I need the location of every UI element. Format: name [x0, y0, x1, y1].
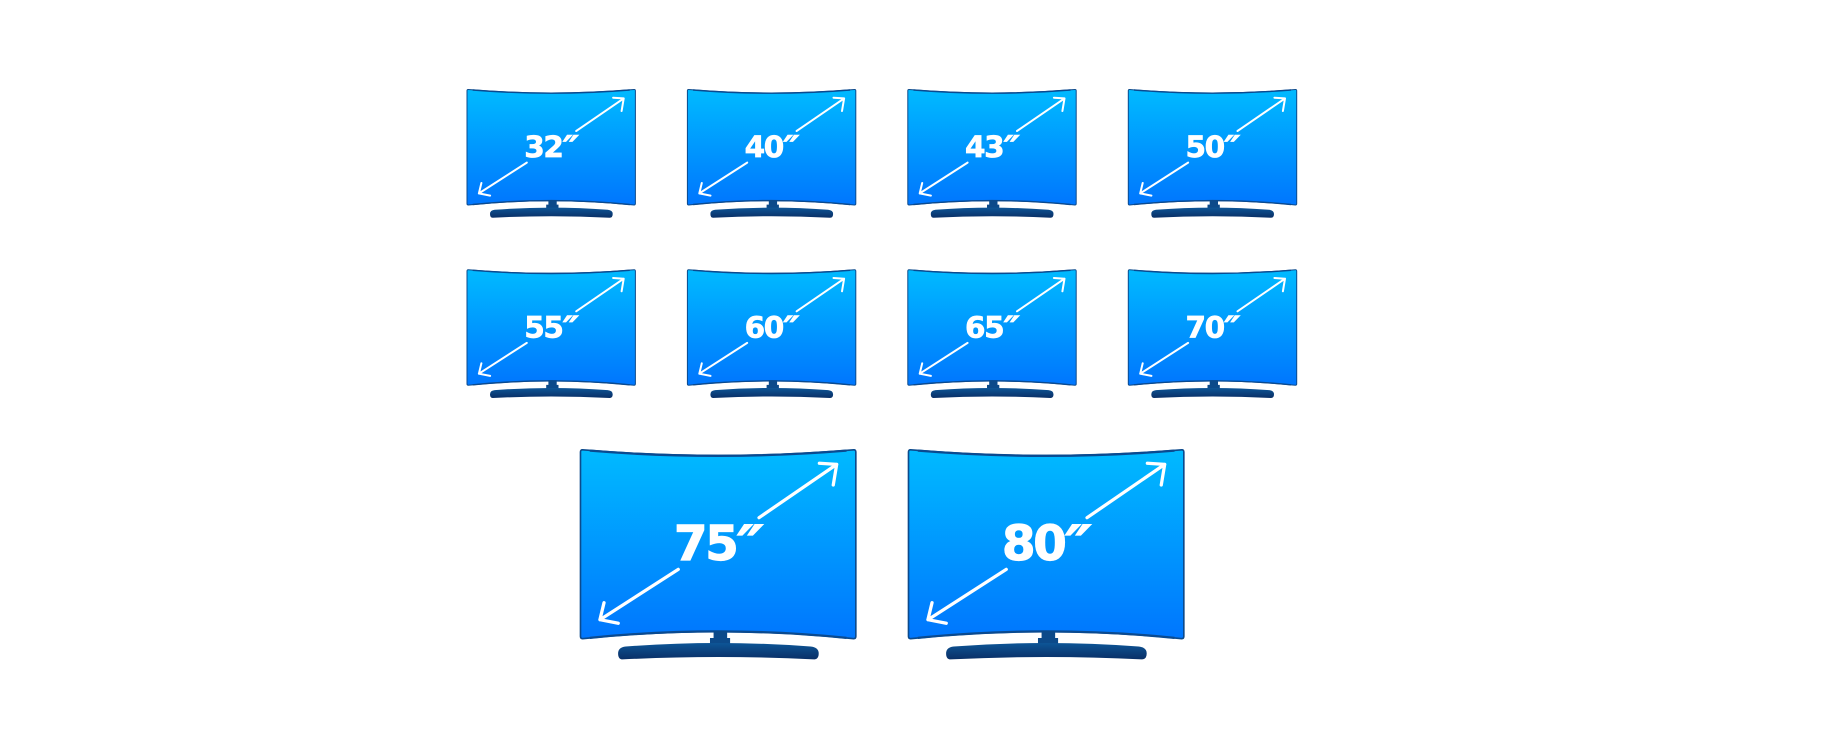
size label: 32 — [524, 130, 562, 164]
size label: ″ — [563, 310, 579, 350]
stand — [931, 200, 1054, 218]
tv: 65 inch — [908, 270, 1076, 398]
size label: ″ — [783, 130, 799, 170]
tv: 55 inch — [467, 270, 635, 398]
diagonal arrow — [928, 463, 1165, 623]
size label: ″ — [738, 514, 764, 580]
tv: 50 inch — [1128, 89, 1297, 218]
size label: ″ — [783, 310, 799, 350]
size label: 70 — [1186, 310, 1224, 344]
size label: ″ — [1004, 130, 1020, 170]
screen — [467, 270, 635, 385]
screen — [687, 270, 856, 385]
screen — [467, 89, 635, 205]
size label: 50 — [1186, 130, 1224, 164]
size label: 40 — [745, 130, 783, 164]
stand — [931, 380, 1054, 398]
size label: 60 — [745, 310, 783, 344]
size label: ″ — [563, 130, 579, 170]
screen — [908, 89, 1076, 205]
screen — [1128, 89, 1297, 205]
tv: 32 inch — [467, 89, 635, 218]
size label: ″ — [1004, 310, 1020, 350]
stand — [1151, 200, 1274, 218]
stand — [618, 630, 819, 659]
tv: 75 inch — [580, 450, 856, 659]
screen — [908, 450, 1184, 639]
diagonal arrow — [1140, 98, 1285, 196]
diagonal arrow — [699, 278, 844, 376]
stand — [1151, 380, 1274, 398]
size label: 80 — [1002, 516, 1065, 572]
tv: 40 inch — [687, 89, 856, 218]
size label: ″ — [1224, 310, 1240, 350]
size label: 75 — [674, 516, 737, 572]
diagonal arrow — [920, 278, 1064, 376]
screen — [687, 89, 856, 205]
diagonal arrow — [699, 98, 844, 196]
screen — [1128, 270, 1297, 385]
stand — [490, 380, 613, 398]
stand — [946, 630, 1147, 659]
size label: ″ — [1224, 130, 1240, 170]
diagonal arrow — [600, 463, 837, 623]
screen — [580, 450, 856, 639]
tv: 43 inch — [908, 89, 1076, 218]
diagonal arrow — [920, 98, 1064, 196]
size label: 65 — [965, 310, 1003, 344]
stand — [710, 380, 833, 398]
tv: 80 inch — [908, 450, 1184, 659]
size label: ″ — [1066, 514, 1092, 580]
stand — [710, 200, 833, 218]
diagonal arrow — [479, 278, 624, 376]
diagonal arrow — [479, 98, 624, 196]
size label: 43 — [965, 130, 1003, 164]
tv: 70 inch — [1128, 270, 1297, 398]
stand — [490, 200, 613, 218]
size label: 55 — [524, 310, 562, 344]
diagonal arrow — [1140, 278, 1285, 376]
tv: 60 inch — [687, 270, 856, 398]
screen — [908, 270, 1076, 385]
